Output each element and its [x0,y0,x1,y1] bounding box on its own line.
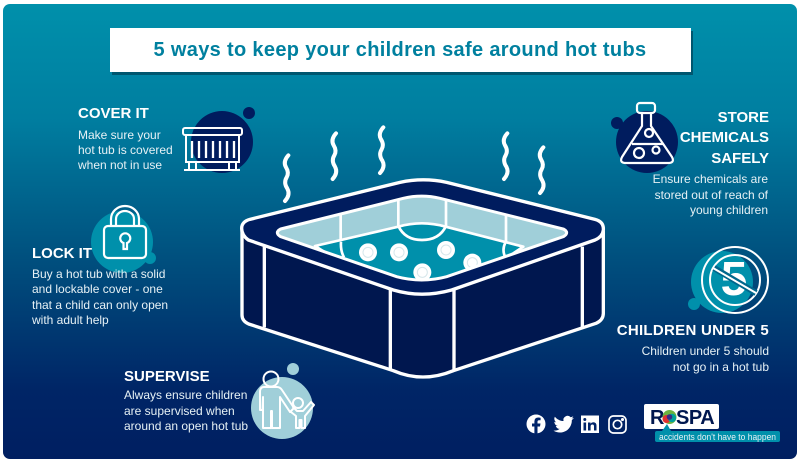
heading: LOCK IT [32,245,92,262]
heading: CHEMICALS [680,129,769,146]
tub interior [276,194,568,282]
heading: COVER IT [78,105,149,122]
icon: no under fives [688,247,768,313]
icon: twitter [554,416,574,432]
body text: young children [690,203,768,217]
logo: RoSPA [644,404,780,442]
body panel lines [264,247,582,371]
body text: Buy a hot tub with a solid [32,267,165,281]
section: children under 5 [617,247,769,374]
heading: SUPERVISE [124,368,210,385]
body text: Always ensure children [124,388,247,402]
body text: are supervised when [124,404,235,418]
body text: stored out of reach of [655,188,769,202]
icon: linkedin [581,416,599,433]
icon: facebook [526,414,546,434]
title banner [110,28,693,75]
heading: SAFELY [711,150,769,167]
title banner: 5 ways to keep your children safe around hot tubs [154,39,646,61]
body text: with adult help [31,313,109,327]
body text: hot tub is covered [78,143,173,157]
body text: Make sure your [78,128,161,142]
section: cover it [77,105,255,173]
icon: hot tub cover [183,107,255,173]
body text: around an open hot tub [124,419,248,433]
section: lock it [31,206,168,327]
heading: CHILDREN UNDER 5 [617,322,769,339]
icon: instagram [609,416,626,433]
section: store chemicals safely [611,103,769,217]
section: supervise [124,363,314,439]
logo: RoSPA: accidents don't have to happen [659,432,776,442]
steam [285,127,544,201]
jets [359,241,481,281]
icon: adult and child [251,363,314,439]
icon: padlock [91,206,156,273]
body text: Ensure chemicals are [653,172,768,186]
illustration: hot tub with steam [242,127,603,377]
body text: when not in use [77,158,162,172]
body text: that a child can only open [32,298,168,312]
body text: not go in a hot tub [673,360,769,374]
icon: no under fives: 5 [721,253,747,306]
social media icons [526,414,626,434]
icon: chemical flask [611,103,678,173]
heading: STORE [718,109,769,126]
body text: and lockable cover - one [32,282,163,296]
water [315,223,523,287]
seat dividers [341,200,506,257]
body text: Children under 5 should [642,344,769,358]
logo: RoSPA: SPA [676,407,714,429]
rim [242,180,603,294]
tub body [242,232,603,377]
logo: RoSPA: R [650,407,665,429]
